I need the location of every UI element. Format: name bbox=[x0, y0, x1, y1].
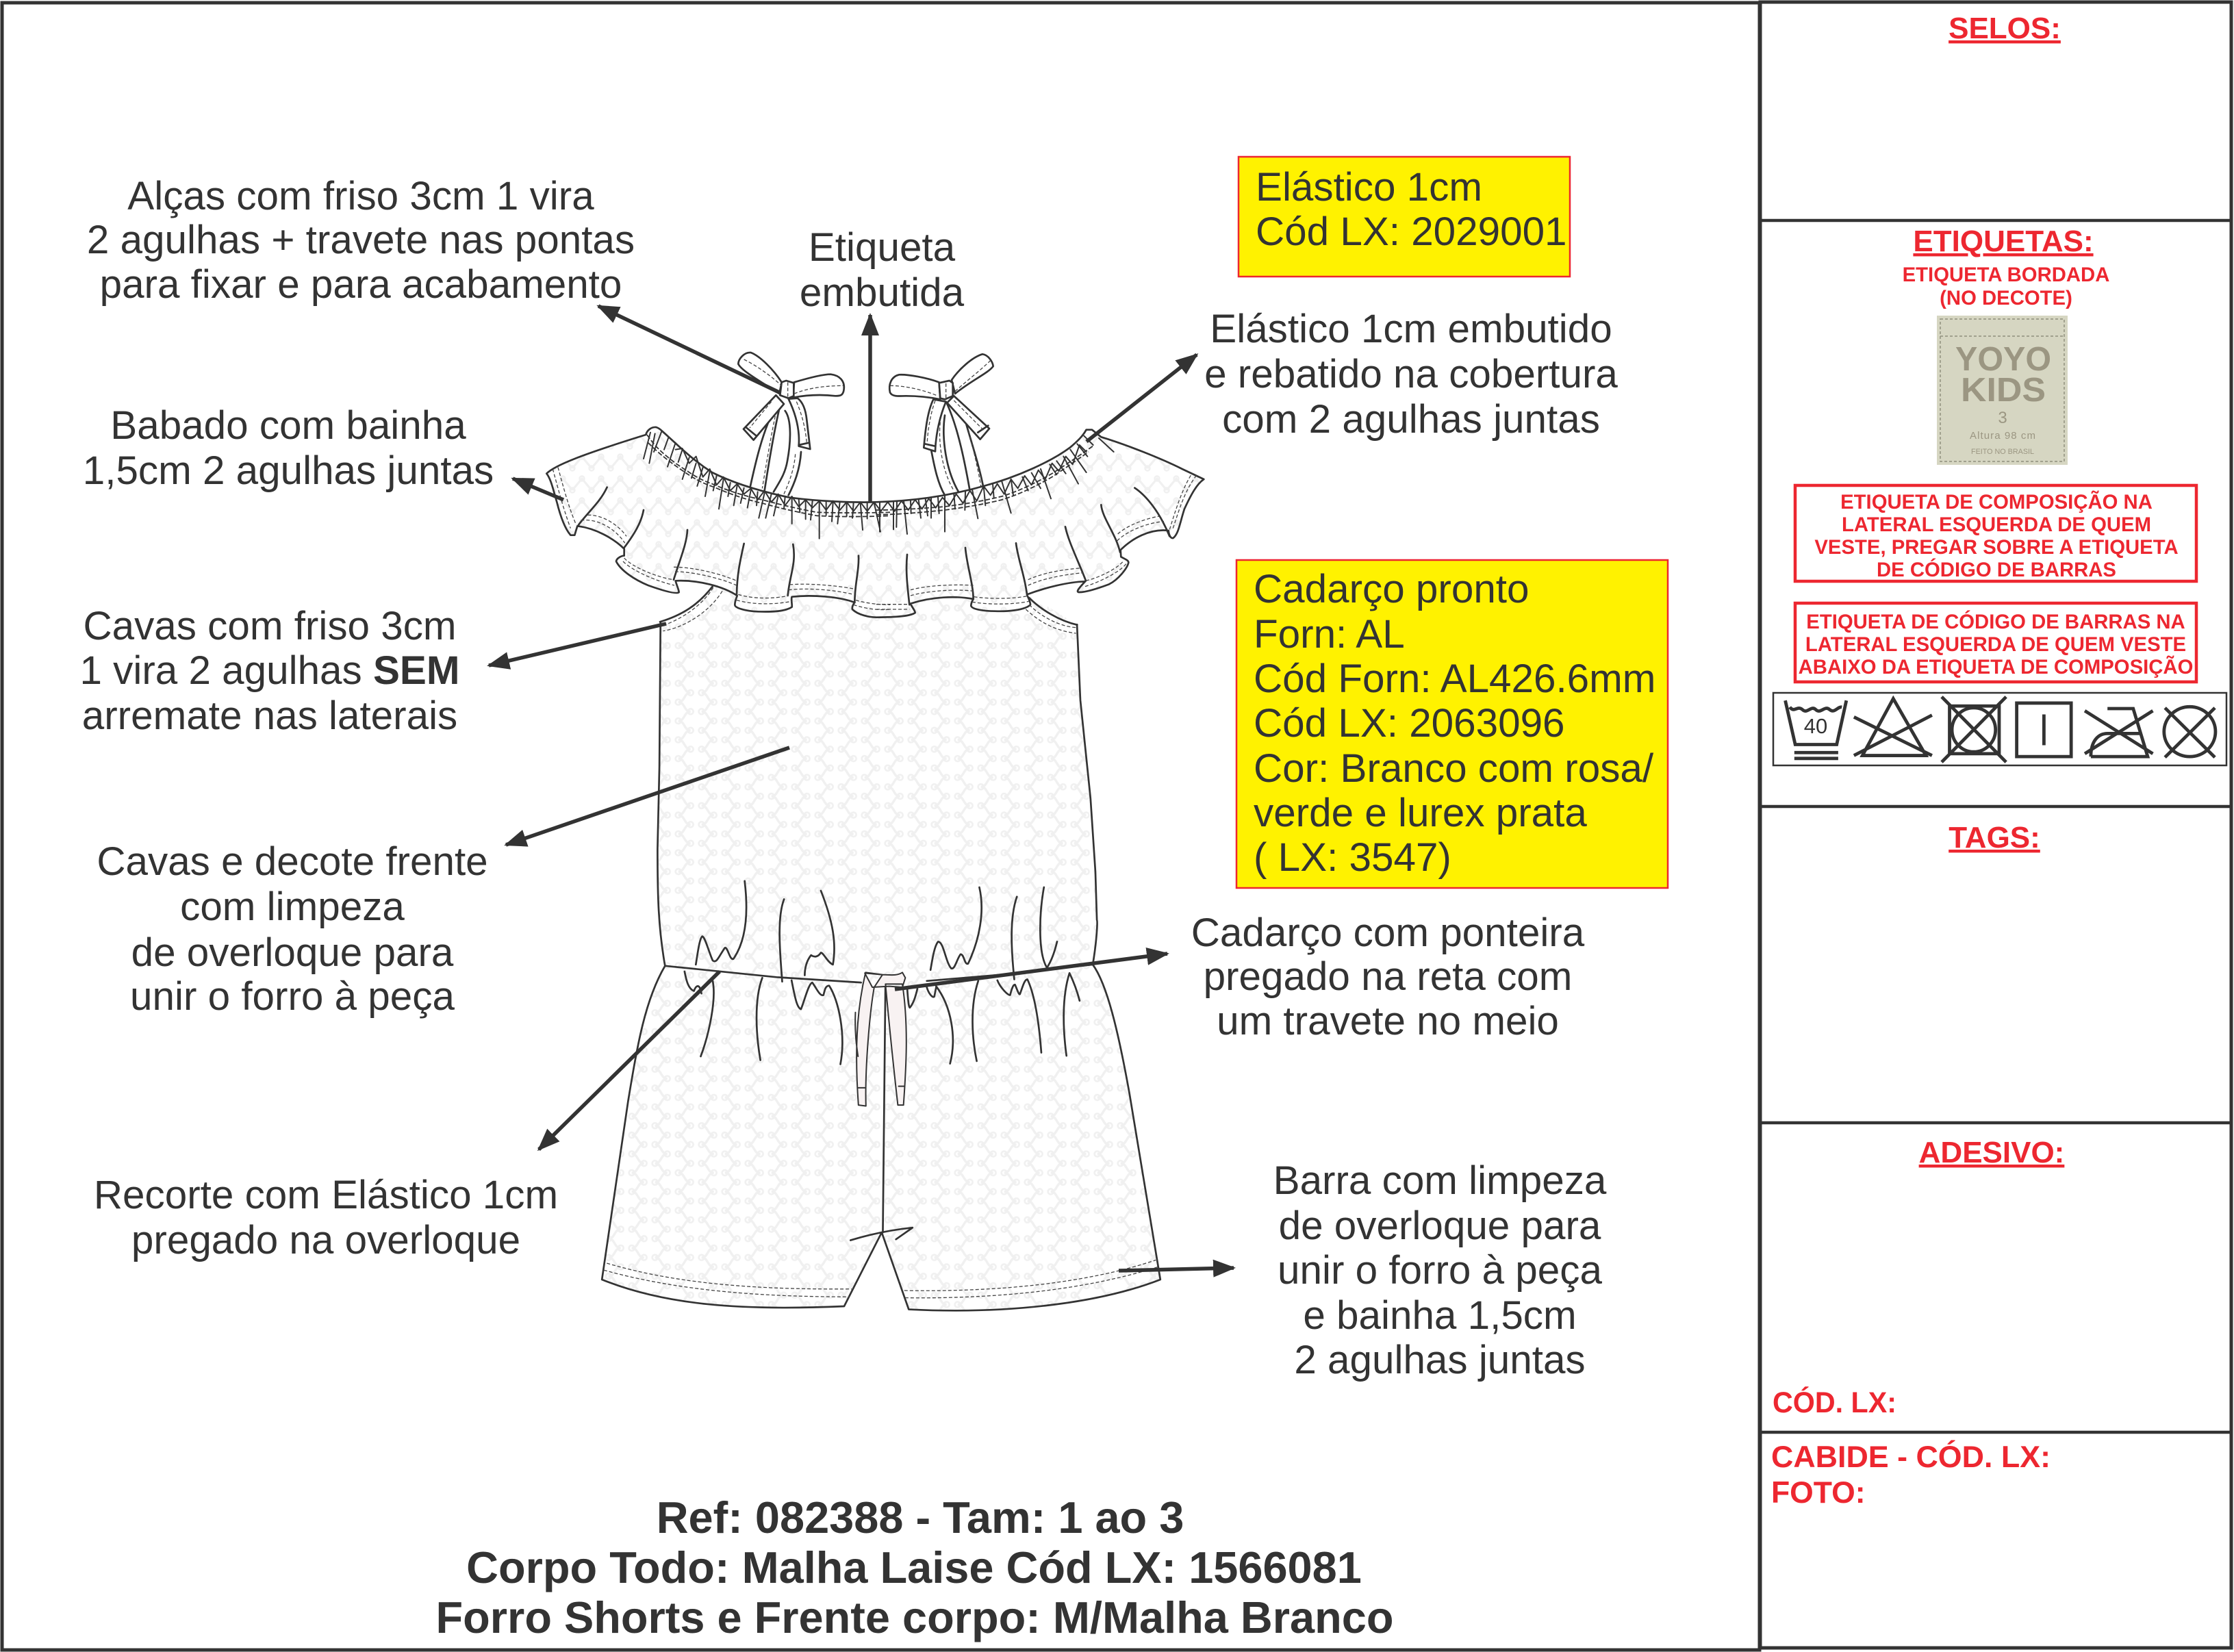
label swatch: yoyo kids: 3 bbox=[1998, 409, 2007, 427]
note: armhole and neckline: unir o forro à peça bbox=[130, 974, 455, 1019]
callout: composition label: ETIQUETA DE COMPOSIÇÃO NA bbox=[1840, 490, 2153, 513]
note: armhole and neckline: de overloque para bbox=[131, 930, 454, 975]
note: armhole and neckline: Cavas e decote frente bbox=[97, 839, 488, 884]
ruffle fill bbox=[546, 427, 1204, 618]
arrow: ruffle bbox=[513, 479, 563, 500]
arrow: elastic bbox=[1087, 355, 1197, 442]
icon: no iron bbox=[2085, 709, 2153, 757]
callout: drawstring details: verde e lurex prata bbox=[1254, 791, 1587, 835]
callout: drawstring details: ( LX: 3547) bbox=[1254, 835, 1451, 880]
callout: drawstring details: Cód LX: 2063096 bbox=[1254, 701, 1565, 746]
callout: drawstring details: Cadarço pronto bbox=[1254, 567, 1529, 611]
right gathers and hem stitching bbox=[876, 436, 1197, 633]
callout: barcode label: ABAIXO DA ETIQUETA DE COMPOSIÇÃO bbox=[1799, 655, 2193, 678]
note: straps: para fixar e para acabamento bbox=[100, 262, 622, 307]
arrow: hem bbox=[1119, 1268, 1234, 1271]
note: hem: 2 agulhas juntas bbox=[1294, 1338, 1586, 1382]
text: embroidered label: ETIQUETA BORDADA bbox=[1903, 264, 2109, 286]
callout: elastic code: Cód LX: 2029001 bbox=[1256, 209, 1567, 254]
note: armhole: 1 vira 2 agulhas SEM bbox=[79, 648, 460, 693]
note: hem: de overloque para bbox=[1279, 1204, 1601, 1248]
note: elastic: Elástico 1cm embutido bbox=[1210, 307, 1612, 351]
note: ruffle: 1,5cm 2 agulhas juntas bbox=[83, 448, 494, 493]
note: elastic cut: pregado na overloque bbox=[131, 1218, 520, 1262]
left bow bbox=[738, 353, 844, 495]
label swatch: yoyo kids: Altura 98 cm bbox=[1970, 430, 2035, 442]
heading: etiquetas: ETIQUETAS: bbox=[1913, 225, 2094, 258]
note: elastic: e rebatido na cobertura bbox=[1204, 352, 1618, 396]
note: drawstring: Cadarço com ponteira bbox=[1191, 911, 1585, 955]
torso and shorts bbox=[602, 587, 1160, 1310]
panel: main drawing frame bbox=[2, 3, 1760, 1650]
note: armhole: Cavas com friso 3cm bbox=[83, 604, 457, 648]
callout: drawstring details bbox=[1236, 560, 1668, 888]
callout: barcode label: LATERAL ESQUERDA DE QUEM VESTE bbox=[1805, 633, 2186, 656]
right bow bbox=[889, 354, 993, 495]
callout: composition label: VESTE, PREGAR SOBRE A ETIQUETA bbox=[1814, 536, 2179, 559]
heading: tags: TAGS: bbox=[1949, 821, 2040, 854]
note: armhole and neckline: com limpeza bbox=[180, 885, 405, 929]
callout: composition label: LATERAL ESQUERDA DE QUEM bbox=[1842, 513, 2151, 536]
heading: adesivo: ADESIVO: bbox=[1919, 1136, 2064, 1169]
arrow: drawstring bbox=[895, 954, 1167, 989]
text: foto: FOTO: bbox=[1771, 1476, 1866, 1510]
callout: drawstring details: Cód Forn: AL426.6mm bbox=[1254, 657, 1655, 701]
note: armhole: arremate nas laterais bbox=[82, 694, 457, 738]
label swatch: yoyo kids: KIDS bbox=[1961, 372, 2046, 409]
icon: no dry clean bbox=[2165, 708, 2215, 757]
callout: composition label: DE CÓDIGO DE BARRAS bbox=[1877, 558, 2116, 581]
text: cabide cod lx: CABIDE - CÓD. LX: bbox=[1771, 1440, 2051, 1474]
arrow: armhole bbox=[489, 624, 666, 665]
note: hem: Barra com limpeza bbox=[1273, 1158, 1607, 1203]
drawstring bbox=[855, 972, 906, 1106]
label swatch: yoyo kids: FEITO NO BRASIL bbox=[1971, 448, 2034, 456]
label swatch: yoyo kids: YOYO bbox=[1955, 341, 2051, 378]
arrow: armhole and neckline bbox=[506, 748, 789, 845]
callout: elastic code bbox=[1239, 157, 1570, 277]
ruffle and straps bbox=[546, 353, 1204, 633]
icon: wash 40 bbox=[1786, 700, 1846, 759]
icon: no bleach bbox=[1854, 699, 1932, 756]
label swatch: yoyo kids bbox=[1937, 316, 2068, 465]
icon: line dry bbox=[2017, 703, 2071, 757]
callout: barcode label bbox=[1795, 603, 2196, 682]
note: straps: 2 agulhas + travete nas pontas bbox=[87, 218, 635, 262]
left gathers and hem stitching bbox=[579, 487, 859, 602]
icon: no tumble dry bbox=[1942, 697, 2006, 762]
armhole left bbox=[660, 587, 713, 622]
heading: selos: SELOS: bbox=[1949, 12, 2061, 45]
panel: right information column bbox=[1760, 2, 2231, 1648]
callout: drawstring details: Cor: Branco com rosa/ bbox=[1254, 746, 1654, 791]
arrow: embedded label bbox=[868, 315, 872, 502]
care symbols: 40 bbox=[1804, 714, 1827, 738]
callout: elastic code: Elástico 1cm bbox=[1256, 165, 1482, 209]
note: elastic: com 2 agulhas juntas bbox=[1222, 397, 1600, 442]
note: straps: Alças com friso 3cm 1 vira bbox=[127, 174, 594, 218]
note: hem: unir o forro à peça bbox=[1278, 1248, 1602, 1293]
note: embedded label: embutida bbox=[800, 270, 965, 315]
arrow: elastic cut bbox=[539, 971, 720, 1149]
callout: drawstring details: Forn: AL bbox=[1254, 612, 1405, 657]
callout: composition label bbox=[1795, 485, 2196, 581]
title: reference and materials: Forro Shorts e Frente corpo: M/Malha Branco bbox=[436, 1592, 1393, 1642]
title: reference and materials: Ref: 082388 - Tam: 1 ao 3 bbox=[657, 1492, 1184, 1542]
ruffle outline bbox=[546, 427, 1204, 618]
note: embedded label: Etiqueta bbox=[809, 225, 956, 270]
icon: dry clean circle bbox=[2164, 707, 2216, 757]
care symbols bbox=[1773, 693, 2226, 765]
left shirring bbox=[644, 431, 880, 539]
note: hem: e bainha 1,5cm bbox=[1303, 1293, 1577, 1338]
text: cod lx: CÓD. LX: bbox=[1773, 1386, 1896, 1419]
title: reference and materials: Corpo Todo: Malha Laise Cód LX: 1566081 bbox=[466, 1542, 1362, 1592]
note: elastic cut: Recorte com Elástico 1cm bbox=[94, 1173, 558, 1217]
note: drawstring: um travete no meio bbox=[1217, 999, 1559, 1043]
note: drawstring: pregado na reta com bbox=[1204, 954, 1572, 999]
garment: romper technical drawing bbox=[546, 353, 1204, 1310]
callout: barcode label: ETIQUETA DE CÓDIGO DE BARRAS NA bbox=[1806, 610, 2185, 633]
text: embroidered label: (NO DECOTE) bbox=[1940, 287, 2072, 309]
icon: tumble circle bbox=[1952, 708, 1996, 752]
note: ruffle: Babado com bainha bbox=[110, 403, 466, 448]
arrow: straps bbox=[598, 306, 779, 392]
